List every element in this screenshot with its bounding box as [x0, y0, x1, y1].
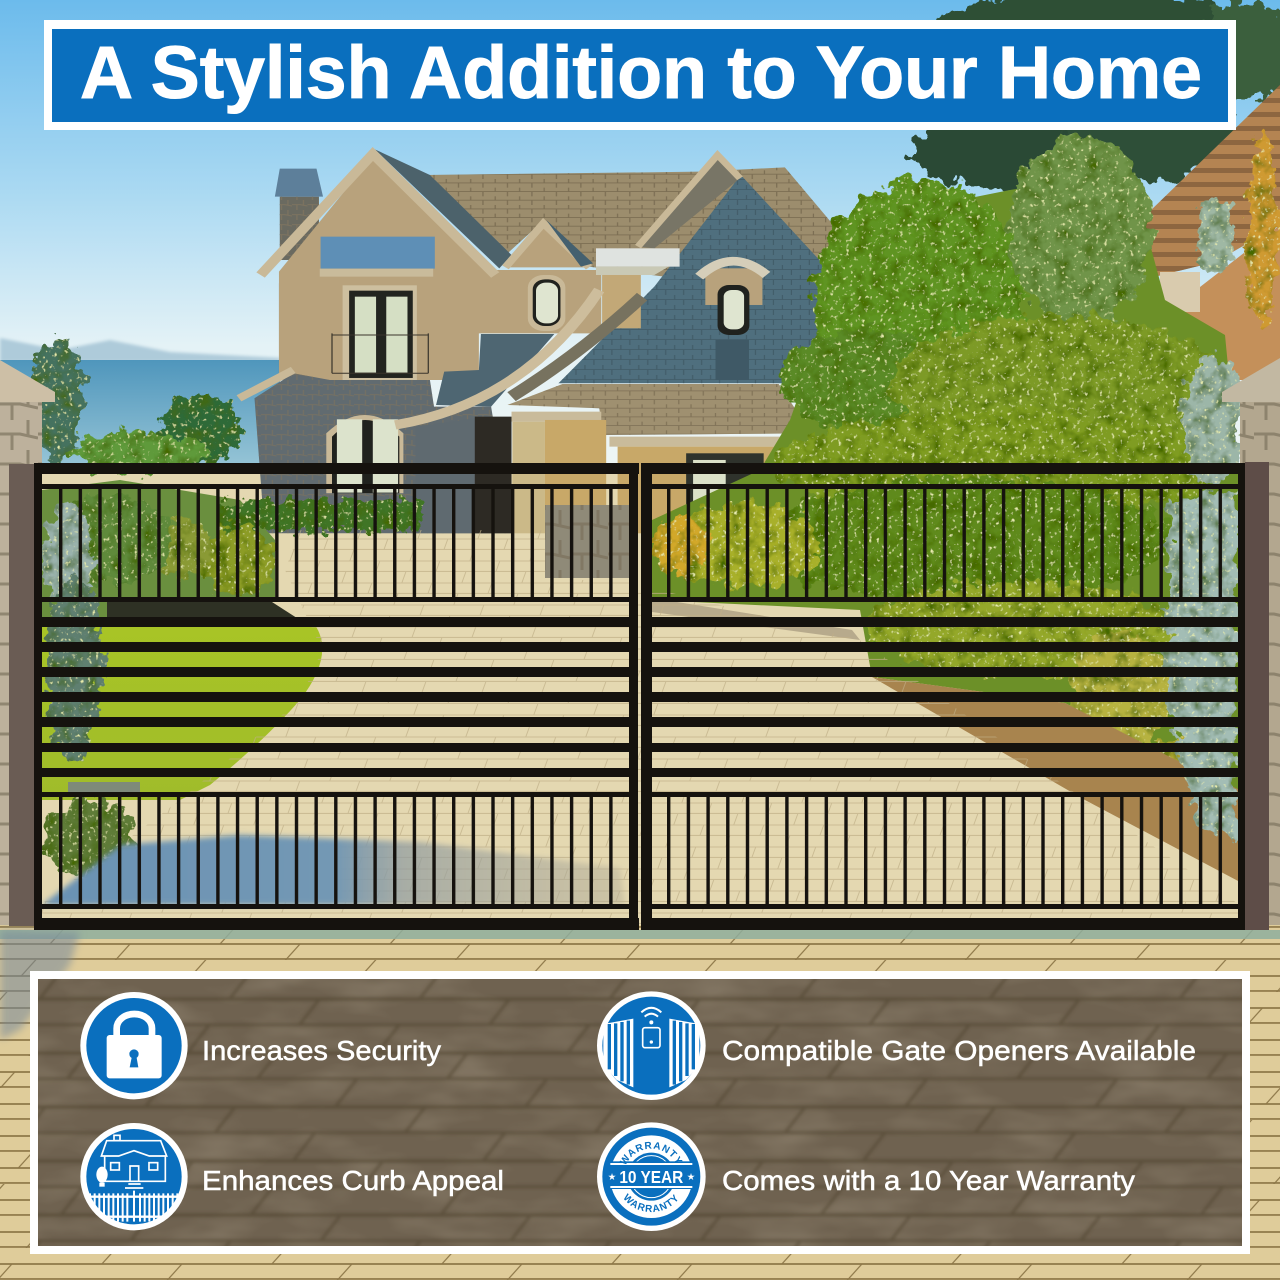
stone gable — [638, 153, 742, 248]
stone wall by entry — [545, 505, 630, 578]
metal awning right — [596, 248, 680, 328]
spruce right — [1165, 490, 1236, 840]
big trees right — [654, 135, 1278, 800]
pickets — [59, 489, 615, 597]
title banner — [44, 20, 1236, 130]
right gate leaf — [641, 463, 1245, 930]
stone curb — [652, 598, 860, 640]
foreground paving — [0, 925, 1280, 1280]
lower slate — [436, 334, 554, 407]
right dormer — [699, 261, 767, 380]
title: A Stylish Addition to Your Home — [80, 31, 1202, 114]
icon: padlock — [80, 992, 188, 1099]
right stone pillar — [1222, 358, 1280, 935]
lower tan roof — [507, 384, 811, 435]
main slate roof — [558, 175, 858, 383]
foliage backing right — [652, 170, 1238, 790]
horizontal slats — [42, 617, 629, 777]
pickets — [667, 489, 1223, 597]
sky — [0, 0, 1280, 480]
gable trim — [261, 154, 495, 275]
awning — [320, 237, 435, 277]
dormer — [505, 220, 593, 331]
blue shadow on driveway — [42, 835, 625, 905]
entry — [416, 412, 789, 533]
stiles and rails — [34, 463, 639, 930]
sea — [0, 360, 280, 490]
right gate post — [1245, 462, 1269, 930]
house — [239, 149, 858, 533]
icon: 10 year warranty badge: WARRANTY — [624, 1193, 678, 1212]
icon: 10 year warranty badge: 10 YEAR — [619, 1167, 683, 1187]
left gate leaf — [34, 463, 639, 930]
mulch bed — [872, 677, 1240, 882]
feature text: curb appeal: Enhances Curb Appeal — [202, 1165, 504, 1196]
icon: 10 year warranty badge: ★ — [687, 1172, 695, 1182]
distant hills — [0, 338, 280, 362]
icon: 10 year warranty badge: WARRANTY — [620, 1142, 683, 1164]
icon: 10 year warranty badge — [597, 1122, 706, 1231]
lawn — [42, 625, 322, 800]
stucco walls — [279, 157, 601, 380]
retaining stone — [68, 782, 140, 797]
neighbouring roof right — [1115, 85, 1280, 380]
horizontal slats — [652, 617, 1238, 777]
gate — [9, 462, 1269, 930]
chimney — [275, 169, 323, 373]
foliage backing left — [42, 480, 275, 780]
left garden — [42, 495, 420, 882]
feature text: security: Increases Security — [202, 1035, 441, 1066]
driveway bricks — [40, 530, 1240, 925]
stiles and rails — [641, 463, 1245, 930]
ground: driveway base — [0, 470, 1280, 1280]
left gate post — [9, 464, 34, 926]
lower left eave — [239, 370, 293, 398]
balcony door — [330, 285, 430, 395]
feature text: warranty: Comes with a 10 Year Warranty — [722, 1165, 1135, 1196]
curved sweep trim — [395, 290, 599, 425]
dark trees top right — [910, 0, 1280, 192]
icon: 10 year warranty badge: ★ — [608, 1172, 616, 1182]
dark roof slope — [375, 149, 512, 268]
panel: features — [30, 971, 1250, 1254]
icon: house with fence — [80, 1123, 188, 1230]
left stone pillar — [0, 360, 55, 935]
feature text: gate openers: Compatible Gate Openers Available — [722, 1035, 1196, 1066]
stone lower wall — [254, 373, 512, 533]
icon: gate opener remote — [597, 991, 706, 1100]
left trees beyond — [32, 338, 242, 472]
back roof — [426, 167, 854, 300]
arched window — [326, 415, 403, 493]
shadow under shrubs — [107, 602, 300, 622]
